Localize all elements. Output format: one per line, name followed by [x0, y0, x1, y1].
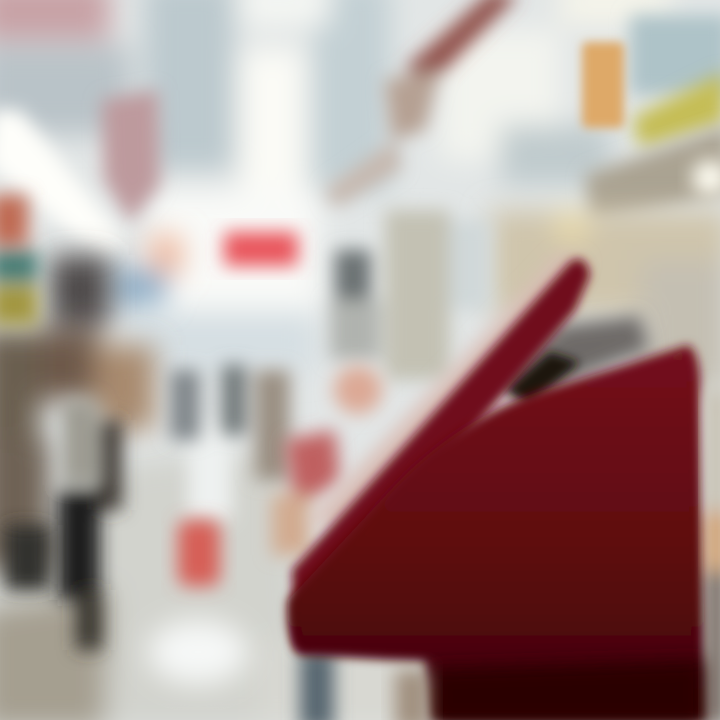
store signs upper right — [582, 15, 720, 222]
hanging banner — [102, 90, 160, 222]
lower floor strip — [395, 670, 429, 720]
tan storefront right — [490, 208, 720, 390]
crowd on the left — [0, 195, 155, 650]
mailbox shadow — [430, 660, 705, 720]
shopper in dark clothes — [58, 400, 122, 650]
ceiling and upper scene — [0, 0, 670, 370]
floor — [0, 450, 430, 720]
mailbox flap — [292, 259, 590, 650]
ceiling beam — [325, 0, 518, 208]
red store sign — [224, 232, 298, 266]
red mailbox — [288, 255, 706, 720]
floor reflection — [148, 420, 248, 684]
small orange sign and blue sign — [108, 235, 182, 304]
mailbox opening — [500, 315, 650, 400]
mailbox flap highlight — [305, 255, 585, 525]
light streak — [0, 110, 125, 262]
right edge store — [706, 390, 720, 720]
center pillar — [330, 210, 490, 380]
background shoppers — [170, 365, 290, 480]
colourful display — [0, 195, 38, 325]
mailbox body — [288, 345, 706, 720]
shopper in red shirt — [272, 366, 382, 720]
